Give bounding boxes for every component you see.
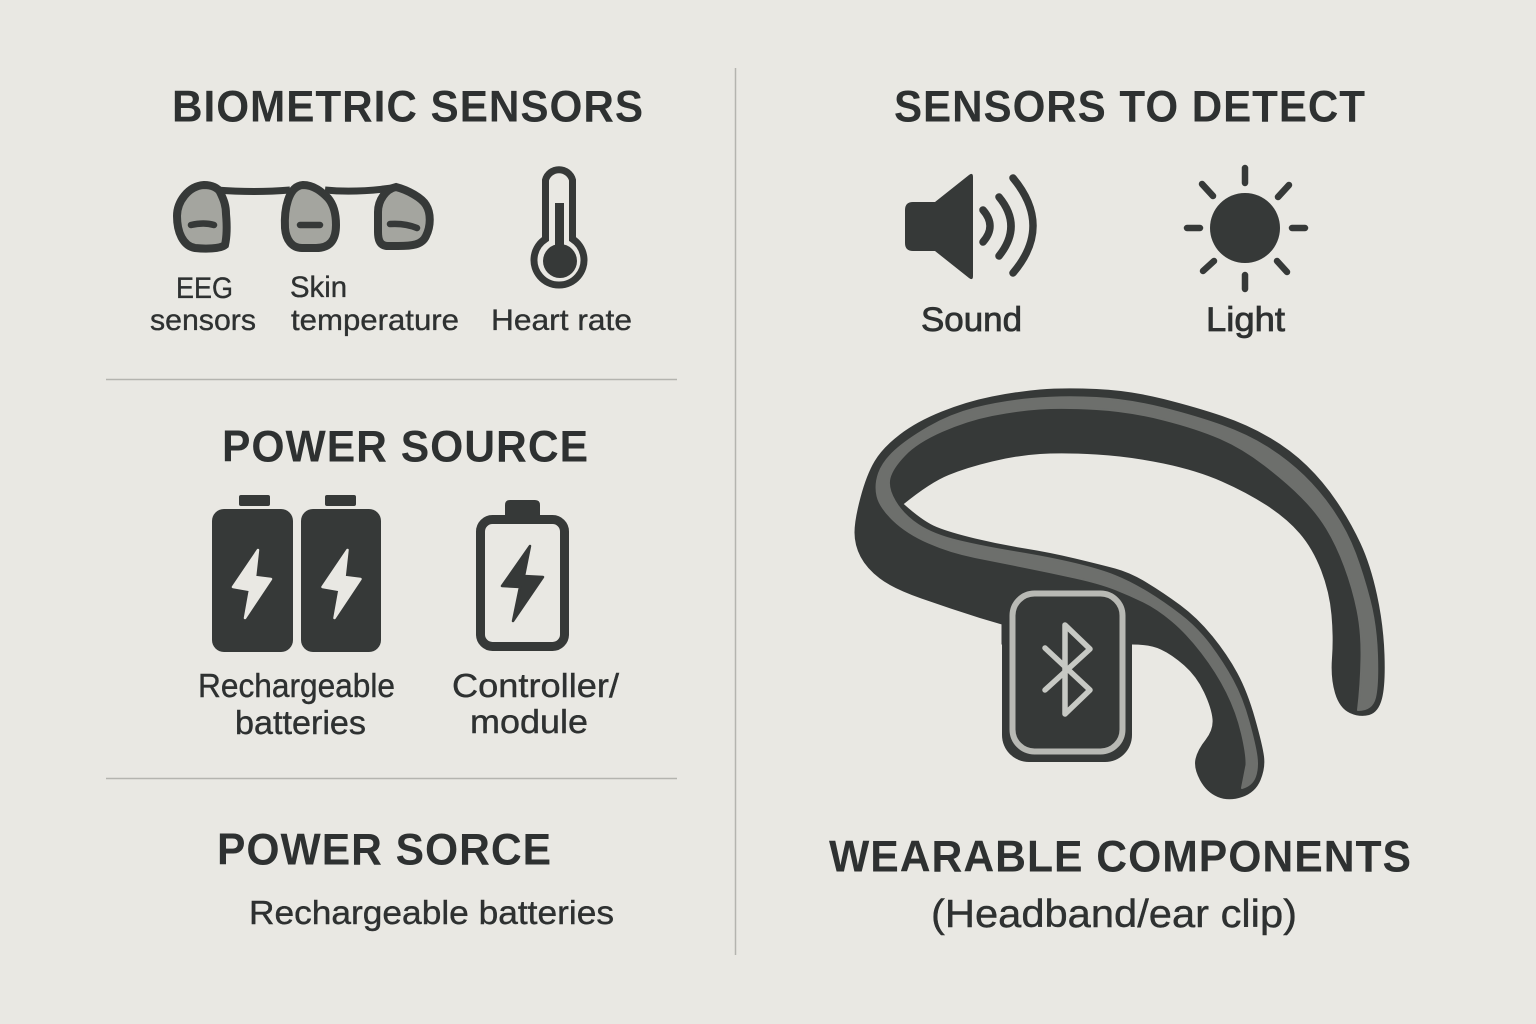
- icon: sun: [1187, 168, 1305, 289]
- panel: biometric sensors: [150, 82, 644, 337]
- label: controller/module: [452, 668, 620, 741]
- heading: power sorce: POWER SORCE: [217, 826, 552, 874]
- icon: rechargeable batteries: [212, 495, 381, 652]
- label: rechargeable batteries: Rechargeable: [198, 668, 395, 705]
- label: EEG sensors: [150, 272, 256, 337]
- panel: sensors to detect: [894, 82, 1366, 339]
- label: EEG sensors: sensors: [150, 304, 256, 337]
- label: sound: Sound: [921, 301, 1022, 339]
- label: skin temperature: Skin: [290, 271, 347, 304]
- label: controller/module: module: [470, 704, 588, 741]
- subheading: headband/ear clip: (Headband/ear clip): [931, 893, 1297, 936]
- illustration: headband with ear clip: [855, 389, 1384, 799]
- label: controller/module: Controller/: [452, 668, 620, 705]
- stripe highlight: [877, 397, 1377, 788]
- panel: power source: [198, 422, 620, 742]
- label: rechargeable batteries: batteries: [235, 705, 366, 742]
- label: skin temperature: [290, 271, 459, 337]
- icon: speaker: [905, 174, 1033, 279]
- heading: biometric sensors: BIOMETRIC SENSORS: [172, 82, 644, 132]
- panel: power sorce: [217, 826, 614, 932]
- icon: controller battery: [480, 500, 564, 646]
- label: EEG sensors: EEG: [176, 272, 233, 305]
- label: skin temperature: temperature: [291, 304, 459, 337]
- icon: thermometer: [534, 170, 584, 285]
- label: heart rate: Heart rate: [491, 304, 632, 337]
- icon: EEG sensor pads: [177, 185, 430, 249]
- panel: wearable components: [829, 389, 1412, 936]
- heading: power source: POWER SOURCE: [222, 422, 589, 472]
- heading: sensors to detect: SENSORS TO DETECT: [894, 82, 1366, 132]
- text: rechargeable batteries: Rechargeable batteries: [249, 895, 614, 932]
- label: rechargeable batteries: [198, 668, 395, 742]
- icon: bluetooth module: [1002, 594, 1132, 762]
- heading: wearable components: WEARABLE COMPONENTS: [829, 832, 1412, 882]
- label: light: Light: [1206, 301, 1286, 339]
